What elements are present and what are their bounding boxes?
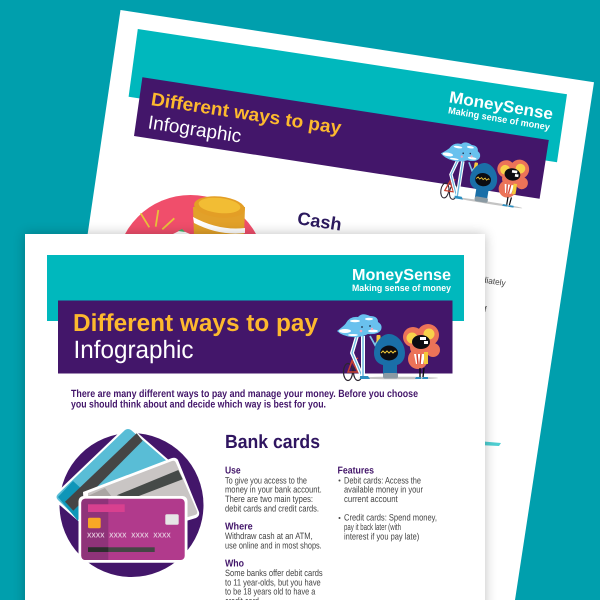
heading: Bank cards: Bank cards	[225, 432, 320, 453]
section: Use: There are two main types:	[225, 494, 313, 504]
back heading: Cash: Cash	[296, 208, 343, 235]
teal header band	[47, 255, 464, 321]
section: Where: Withdraw cash at an ATM,	[225, 531, 313, 541]
icon: bank cards in circle	[54, 426, 204, 577]
section: Who: to 11 year-olds, but you have	[225, 577, 321, 587]
section: Use: To give you access to the	[225, 475, 307, 485]
purple title banner	[58, 300, 452, 374]
back logo tagline: Making sense of money	[447, 105, 551, 133]
logo tagline: Making sense of money	[352, 283, 452, 293]
back purple title banner	[134, 77, 549, 199]
title: Different ways to pay	[73, 310, 318, 337]
back characters illustration	[434, 139, 533, 211]
section: Who: Who	[225, 558, 244, 569]
section: Who: to be 18 years old to have a	[225, 587, 316, 597]
back subtitle: Infographic	[147, 112, 243, 147]
intro text: There are many different ways to pay and manage your money. Before you choose	[71, 388, 418, 400]
section: Use	[225, 466, 322, 513]
icon: cash circle with coins	[116, 194, 265, 344]
subtitle: Infographic	[74, 336, 194, 364]
magenta front card	[78, 496, 188, 563]
back text fragment: immediately	[461, 271, 507, 288]
back logo: MoneySense: MoneySense	[448, 88, 554, 124]
magenta front card: XXXX XXXX XXXX XXXX	[87, 532, 171, 540]
back teal hatch fragment	[478, 441, 501, 446]
back title: Different ways to pay	[150, 88, 343, 138]
section: Features: Debit cards: Access the	[344, 475, 421, 485]
section: Features: Features	[338, 466, 374, 477]
section: Use: money in your bank account.	[225, 485, 322, 495]
section: Who	[225, 558, 323, 600]
logo: MoneySense: MoneySense	[352, 267, 451, 284]
purple circle	[60, 433, 204, 577]
section: Where: Where	[225, 521, 253, 532]
section: Where: use online and in most shops.	[225, 540, 322, 550]
section: Features: interest if you pay late)	[344, 531, 419, 541]
panel: front page sheet	[25, 234, 485, 600]
front page shadow	[25, 234, 485, 600]
front sheet paper	[25, 234, 485, 600]
section: Features	[338, 466, 437, 541]
section: Features: available money in your	[344, 485, 423, 495]
intro text: you should think about and decide which way is best for you.	[71, 399, 326, 411]
back text fragment 2: of	[479, 304, 488, 314]
intro text	[71, 388, 418, 411]
blue card	[54, 426, 171, 526]
section: Features: current account	[344, 494, 398, 504]
section: Use: debit cards and credit cards.	[225, 503, 319, 513]
grey card	[83, 458, 199, 538]
section: Features: pay it back later (with	[344, 522, 401, 532]
section: Features: Credit cards: Spend money,	[344, 513, 437, 523]
section: Where	[225, 521, 322, 550]
back teal header band	[129, 29, 567, 162]
section: Use: Use	[225, 466, 241, 477]
characters illustration	[337, 314, 440, 380]
section: Who: Some banks offer debit cards	[225, 568, 323, 578]
